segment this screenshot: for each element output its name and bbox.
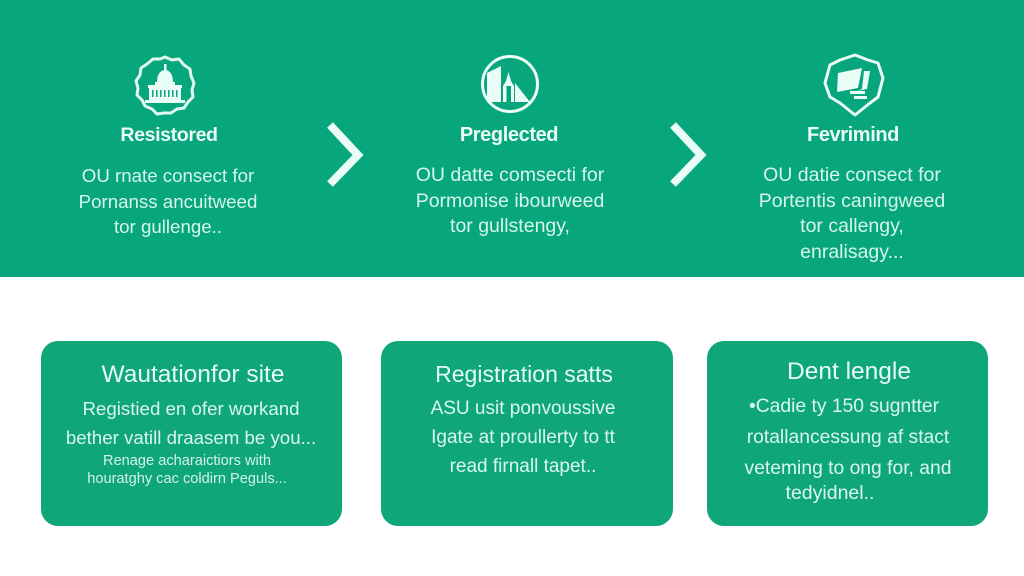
text: card 1 small note: Renage acharaictiors with	[103, 453, 271, 469]
panel: top process band	[0, 0, 1024, 277]
text: step 2 description: OU datte comsecti for	[416, 164, 604, 186]
text: step 3 description: tor callengy,	[800, 215, 904, 237]
heading: card 1: Wautationfor site	[102, 361, 284, 388]
text: card 3 last line: tedyidnel..	[786, 482, 874, 504]
text: card 1 body	[66, 398, 316, 448]
icon: open book shield	[824, 54, 884, 116]
text: card 1 body: Registied en ofer workand	[82, 398, 300, 419]
heading: card 3: Dent lengle	[787, 358, 911, 385]
heading: step 2: Preglected	[460, 124, 558, 146]
text: step 1 description: OU rnate consect for	[82, 165, 254, 186]
text: card 3 body: rotallancessung af stact	[747, 427, 949, 448]
text: card 3 body: •Cadie ty 150 sugntter	[749, 396, 939, 417]
panel: card 1	[41, 341, 342, 526]
text: card 1 small note: houratghy cac coldirn Peguls...	[87, 471, 287, 487]
icon: city towers circle	[481, 55, 539, 113]
text: step 2 description	[416, 164, 604, 237]
text: card 2 body: Igate at proullerty to tt	[431, 427, 615, 448]
text: step 1 description: tor gullenge..	[114, 216, 222, 237]
text: step 1 description	[79, 165, 257, 237]
text: card 1 body: bether vatill draasem be you...	[66, 426, 316, 448]
text: card 3 body: veteming to ong for, and	[745, 458, 951, 479]
heading: card 2: Registration satts	[435, 361, 613, 387]
text: card 2 body: read firnall tapet..	[450, 456, 596, 477]
text: step 3 description: enralisagy...	[800, 240, 904, 262]
text: step 3 description: Portentis caningweed	[759, 190, 945, 212]
text: step 3 description: OU datie consect for	[763, 164, 941, 186]
panel: card 2	[381, 341, 673, 526]
text: step 1 description: Pornanss ancuitweed	[79, 190, 257, 212]
arrow: step 2 to step 3	[670, 122, 706, 187]
text: card 2 body: ASU usit ponvoussive	[431, 398, 615, 419]
panel: card 3	[707, 341, 988, 526]
heading: step 1: Resistored	[120, 124, 218, 146]
text: card 3 body	[744, 396, 951, 479]
text: card 2 body	[430, 398, 615, 477]
arrow: step 1 to step 2	[327, 122, 364, 187]
text: step 2 description: Pormonise ibourweed	[416, 190, 604, 212]
text: step 2 description: tor gullstengy,	[450, 215, 570, 237]
heading: step 3: Fevrimind	[807, 124, 899, 146]
icon: capitol building badge	[134, 56, 196, 116]
text: card 1 small note	[87, 453, 287, 487]
text: step 3 description	[759, 164, 945, 262]
